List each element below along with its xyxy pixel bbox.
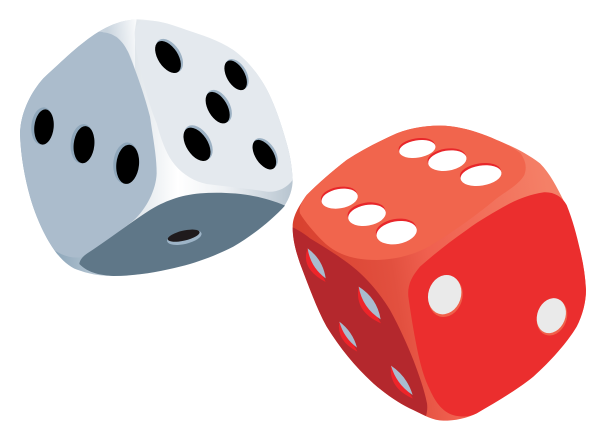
front-right face [135, 21, 293, 192]
pips: four on left face [306, 248, 413, 399]
bottom face [79, 193, 285, 276]
pips: three on left face [29, 106, 141, 185]
white die [20, 19, 293, 276]
die body [20, 19, 293, 276]
left face [293, 227, 427, 416]
pips: five on right face [150, 34, 283, 174]
right face [408, 192, 586, 417]
left face [20, 32, 157, 258]
top ridge highlight [98, 19, 137, 70]
top face [300, 126, 526, 260]
red die [293, 126, 586, 421]
die body [293, 126, 586, 421]
pips: two on right face [423, 271, 573, 340]
pips: six on top face [319, 136, 503, 247]
pip: one on bottom face [166, 227, 203, 248]
